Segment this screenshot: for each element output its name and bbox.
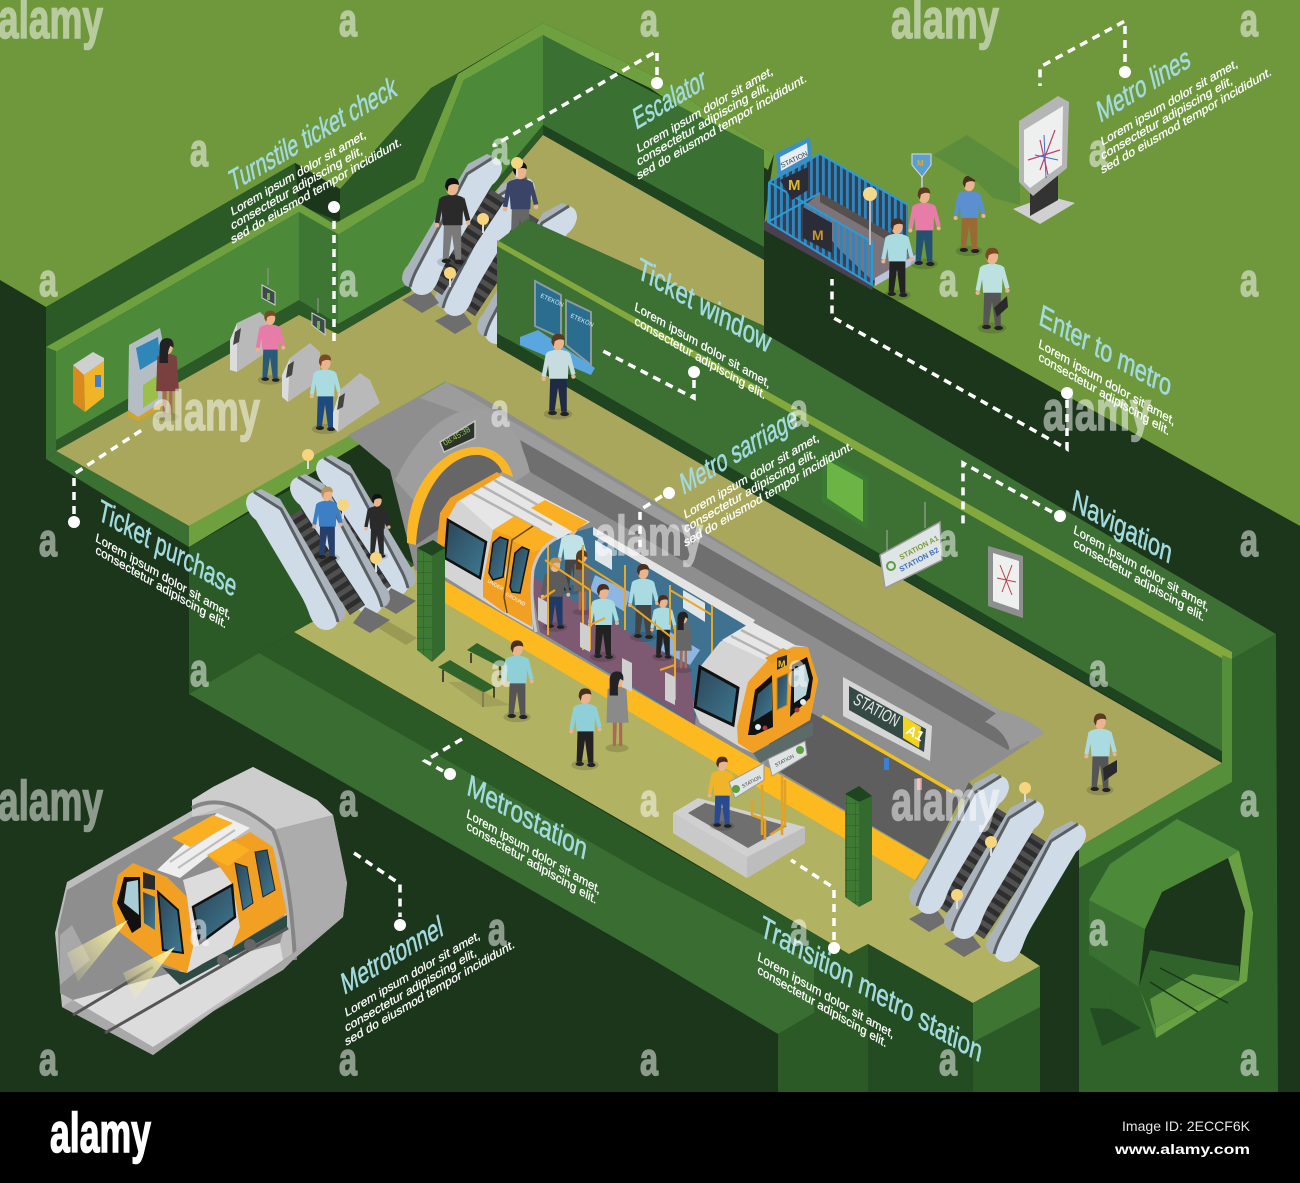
panel: navigation wall block xyxy=(497,219,1276,763)
watermark: alamy repeats: a xyxy=(1240,514,1258,566)
tunnel train xyxy=(112,813,287,985)
watermark: alamy repeats: a xyxy=(939,514,957,566)
watermark: alamy repeats: a xyxy=(939,1033,957,1085)
watermark: alamy repeats: a xyxy=(1089,903,1107,955)
arch back wall xyxy=(395,408,530,530)
watermark: alamy repeats: a xyxy=(488,903,506,955)
wall map panel xyxy=(988,546,1023,618)
watermark: alamy repeats: a xyxy=(1089,644,1107,696)
watermark: alamy repeats: a xyxy=(939,254,957,306)
lamps lower hall xyxy=(302,449,382,572)
dotted connectors xyxy=(74,21,1125,940)
pole sign xyxy=(912,154,931,190)
people near entrance xyxy=(881,176,1010,334)
panel: floors xyxy=(56,135,1222,1003)
headlight beams xyxy=(67,920,175,1000)
tunnel portal arch xyxy=(407,447,513,545)
label: metro lines: sed do eiusmod tempor incididunt. xyxy=(1100,65,1273,177)
panel: ticket windows: ETEKÖN xyxy=(569,312,595,329)
panel: upper concourse walls xyxy=(46,23,774,459)
label: metrotonnel: Lorem ipsum dolor sit amet, xyxy=(344,928,481,1020)
label: ticket window: consectetur adipiscing elit. xyxy=(633,314,767,403)
clock display xyxy=(440,421,475,452)
watermark: alamy repeats: a xyxy=(790,384,808,436)
footer band: www.alamy.com xyxy=(1114,1141,1250,1157)
watermark: alamy repeats: a xyxy=(491,384,509,436)
navigation sign station xyxy=(880,502,942,588)
direction signs xyxy=(729,741,807,798)
label: turnstile ticket check: sed do eiusmod tempor incididunt. xyxy=(230,135,403,247)
watermark: alamy repeats: a xyxy=(339,254,357,306)
watermark: alamy repeats: a xyxy=(640,1033,658,1085)
passengers xyxy=(541,521,692,673)
label: enter to metro: Enter to metro xyxy=(1037,299,1174,404)
panel: right block xyxy=(1010,634,1278,1092)
label: enter to metro: Lorem ipsum dolor sit amet, xyxy=(1037,337,1176,429)
woman at ATM xyxy=(155,338,179,421)
watermark: alamy repeats: a xyxy=(1089,124,1107,176)
person on escalator navy suit xyxy=(503,162,538,252)
label: metrotonnel: consectetur adipiscing elit, xyxy=(344,945,478,1035)
rear car: GROUND xyxy=(504,592,527,608)
panel: metro entrance: M xyxy=(812,227,824,243)
panel: metro entrance xyxy=(764,137,1010,334)
label: transition metro station: Lorem ipsum dolor sit amet, xyxy=(756,950,895,1042)
watermark: alamy repeats: a xyxy=(339,1033,357,1085)
label: metro sarriage: Lorem ipsum dolor sit amet, xyxy=(683,430,820,522)
entrance signboard: STATION xyxy=(780,151,809,170)
panel: tunnel portal right xyxy=(1089,819,1253,1046)
watermark: alamy repeats: a xyxy=(39,254,57,306)
watermark: alamy repeats: a xyxy=(1240,774,1258,826)
station sign: A1 xyxy=(904,722,927,744)
watermark: alamy repeats: a xyxy=(1240,1033,1258,1085)
person right with briefcase xyxy=(1084,713,1117,795)
panel: escalator hall upper xyxy=(402,154,577,344)
rear car xyxy=(437,472,590,632)
panel: metro train xyxy=(437,472,818,763)
label: metro lines: Metro lines xyxy=(1094,41,1193,130)
panel: ATM machine xyxy=(128,328,179,421)
label: ticket purchase: Ticket purchase xyxy=(96,494,239,604)
label: escalator: Escalator xyxy=(630,62,709,137)
label: metrostation: Metrostation xyxy=(465,769,590,867)
benches xyxy=(438,643,510,707)
lamps right xyxy=(951,782,1031,909)
label: escalator: Lorem ipsum dolor sit amet, xyxy=(636,64,774,156)
panel: ticket windows: ETEKÖN xyxy=(539,292,565,309)
lamps upper hall xyxy=(444,157,523,287)
direction signs: STATION xyxy=(741,774,763,790)
watermark: alamy repeats: a xyxy=(491,122,509,174)
pillar right xyxy=(845,786,872,907)
label: transition metro station: Transition metro station xyxy=(758,910,985,1070)
yellow platform strip xyxy=(440,578,928,880)
panel: lower platform front faces xyxy=(46,381,1040,1092)
label: navigation: Navigation xyxy=(1070,484,1175,571)
person on escalator dark jacket xyxy=(435,178,470,268)
watermark: alamy repeats: a xyxy=(190,124,208,176)
label: navigation: Lorem ipsum dolor sit amet, xyxy=(1072,523,1210,614)
wall plate green xyxy=(822,452,868,530)
pillar left xyxy=(417,540,445,662)
label: metro lines xyxy=(1094,41,1273,177)
front car: M xyxy=(778,659,786,669)
clock display: 08:45:38 xyxy=(442,425,472,448)
label: ticket purchase: consectetur adipiscing elit. xyxy=(94,543,228,632)
label: metrotonnel: Metrotonnel xyxy=(338,910,446,1002)
watermark: alamy repeats: a xyxy=(39,514,57,566)
label: turnstile ticket check xyxy=(227,70,403,247)
watermark: alamy repeats: a xyxy=(1240,254,1258,306)
panel: ticket windows xyxy=(520,281,595,420)
label: metro lines: consectetur adipiscing elit, xyxy=(1100,73,1234,163)
panel: ticket vending machine xyxy=(73,352,104,412)
station sign xyxy=(843,677,932,761)
panel: escalators right xyxy=(909,773,1086,962)
panel: tunnel gray wall xyxy=(348,382,1044,860)
label: metrostation: Lorem ipsum dolor sit amet, xyxy=(465,807,601,897)
label: metro sarriage: consectetur adipiscing elit, xyxy=(683,446,817,536)
ground surface xyxy=(0,0,1300,526)
watermark: alamy repeats: alamy xyxy=(595,504,703,567)
rear car: UNDER xyxy=(486,579,505,593)
back and side fences xyxy=(768,154,908,285)
front car xyxy=(693,622,818,763)
watermark: alamy repeats: a xyxy=(640,774,658,826)
wall signs xyxy=(262,268,325,335)
watermark: alamy repeats: a xyxy=(39,1033,57,1085)
navigation sign station: STATION B2 xyxy=(898,545,940,574)
watermark: alamy repeats: alamy xyxy=(0,769,103,832)
watermark: alamy repeats: a xyxy=(190,644,208,696)
label: metrostation: consectetur adipiscing elit. xyxy=(465,819,598,907)
platform passengers xyxy=(501,640,629,770)
entrance signboard xyxy=(776,137,812,178)
pole sign: M xyxy=(917,159,924,168)
watermark: alamy repeats: a xyxy=(190,903,208,955)
watermark: alamy repeats: a xyxy=(339,774,357,826)
lamp post xyxy=(863,187,877,245)
footer band xyxy=(0,1092,1300,1183)
label: ticket window: Lorem ipsum dolor sit amet, xyxy=(633,300,771,391)
label: metro lines: Lorem ipsum dolor sit amet, xyxy=(1100,56,1239,149)
label: transition metro station: consectetur adipiscing elit. xyxy=(756,963,888,1051)
label: metro sarriage: Metro sarriage xyxy=(677,401,800,502)
label: metro sarriage xyxy=(677,401,854,550)
label: metrotonnel xyxy=(338,910,516,1049)
label: enter to metro: consectetur adipiscing elit. xyxy=(1037,350,1171,439)
panel: metro tunnel section xyxy=(55,767,347,1055)
panel: metro entrance: M xyxy=(788,177,800,194)
label: ticket window: Ticket window xyxy=(635,252,774,361)
watermark: alamy repeats: alamy xyxy=(1043,379,1151,442)
yellow guide rail xyxy=(822,716,953,792)
person at window xyxy=(542,334,576,420)
label: navigation xyxy=(1070,484,1210,625)
connector end dots xyxy=(68,66,1131,954)
watermark: alamy repeats: alamy xyxy=(152,379,260,442)
direction signs: STATION xyxy=(774,753,796,769)
watermark: alamy repeats: a xyxy=(788,644,806,696)
station sign: STATION xyxy=(850,690,903,731)
panel: turnstiles xyxy=(230,268,380,434)
footer band: alamy xyxy=(50,1101,151,1164)
panel: escalators to platform xyxy=(246,449,417,645)
label: navigation: consectetur adipiscing elit. xyxy=(1072,536,1206,625)
watermark: alamy repeats: alamy xyxy=(891,769,999,832)
carriage interior xyxy=(530,521,755,725)
label: escalator: sed do eiusmod tempor incididunt. xyxy=(636,71,808,183)
watermark: alamy repeats: a xyxy=(491,644,509,696)
footer band: Image ID: 2ECCF6K xyxy=(1122,1118,1251,1134)
label: turnstile ticket check: consectetur adipiscing elit, xyxy=(230,143,364,233)
label: turnstile ticket check: Turnstile ticket check xyxy=(227,70,400,199)
panel: metro map pylon xyxy=(933,96,1075,224)
person blue on escalator xyxy=(312,486,343,563)
navigation sign station: STATION A1 xyxy=(898,534,940,562)
person descending xyxy=(708,757,737,831)
label: metrotonnel: sed do eiusmod tempor incididunt. xyxy=(344,937,516,1049)
person black on escalator xyxy=(364,494,391,560)
label: metro sarriage: sed do eiusmod tempor incididunt. xyxy=(683,439,854,550)
rails xyxy=(73,928,288,1033)
yellow poles xyxy=(540,540,712,700)
label: escalator: consectetur adipiscing elit, xyxy=(636,79,770,169)
label: ticket purchase: Lorem ipsum dolor sit amet, xyxy=(94,531,232,622)
panel: transition stairs xyxy=(673,741,807,878)
panel: shaft dark under entrance xyxy=(764,224,1300,640)
label: turnstile ticket check: Lorem ipsum dolor sit amet, xyxy=(230,127,367,219)
watermark: alamy repeats: a xyxy=(790,903,808,955)
